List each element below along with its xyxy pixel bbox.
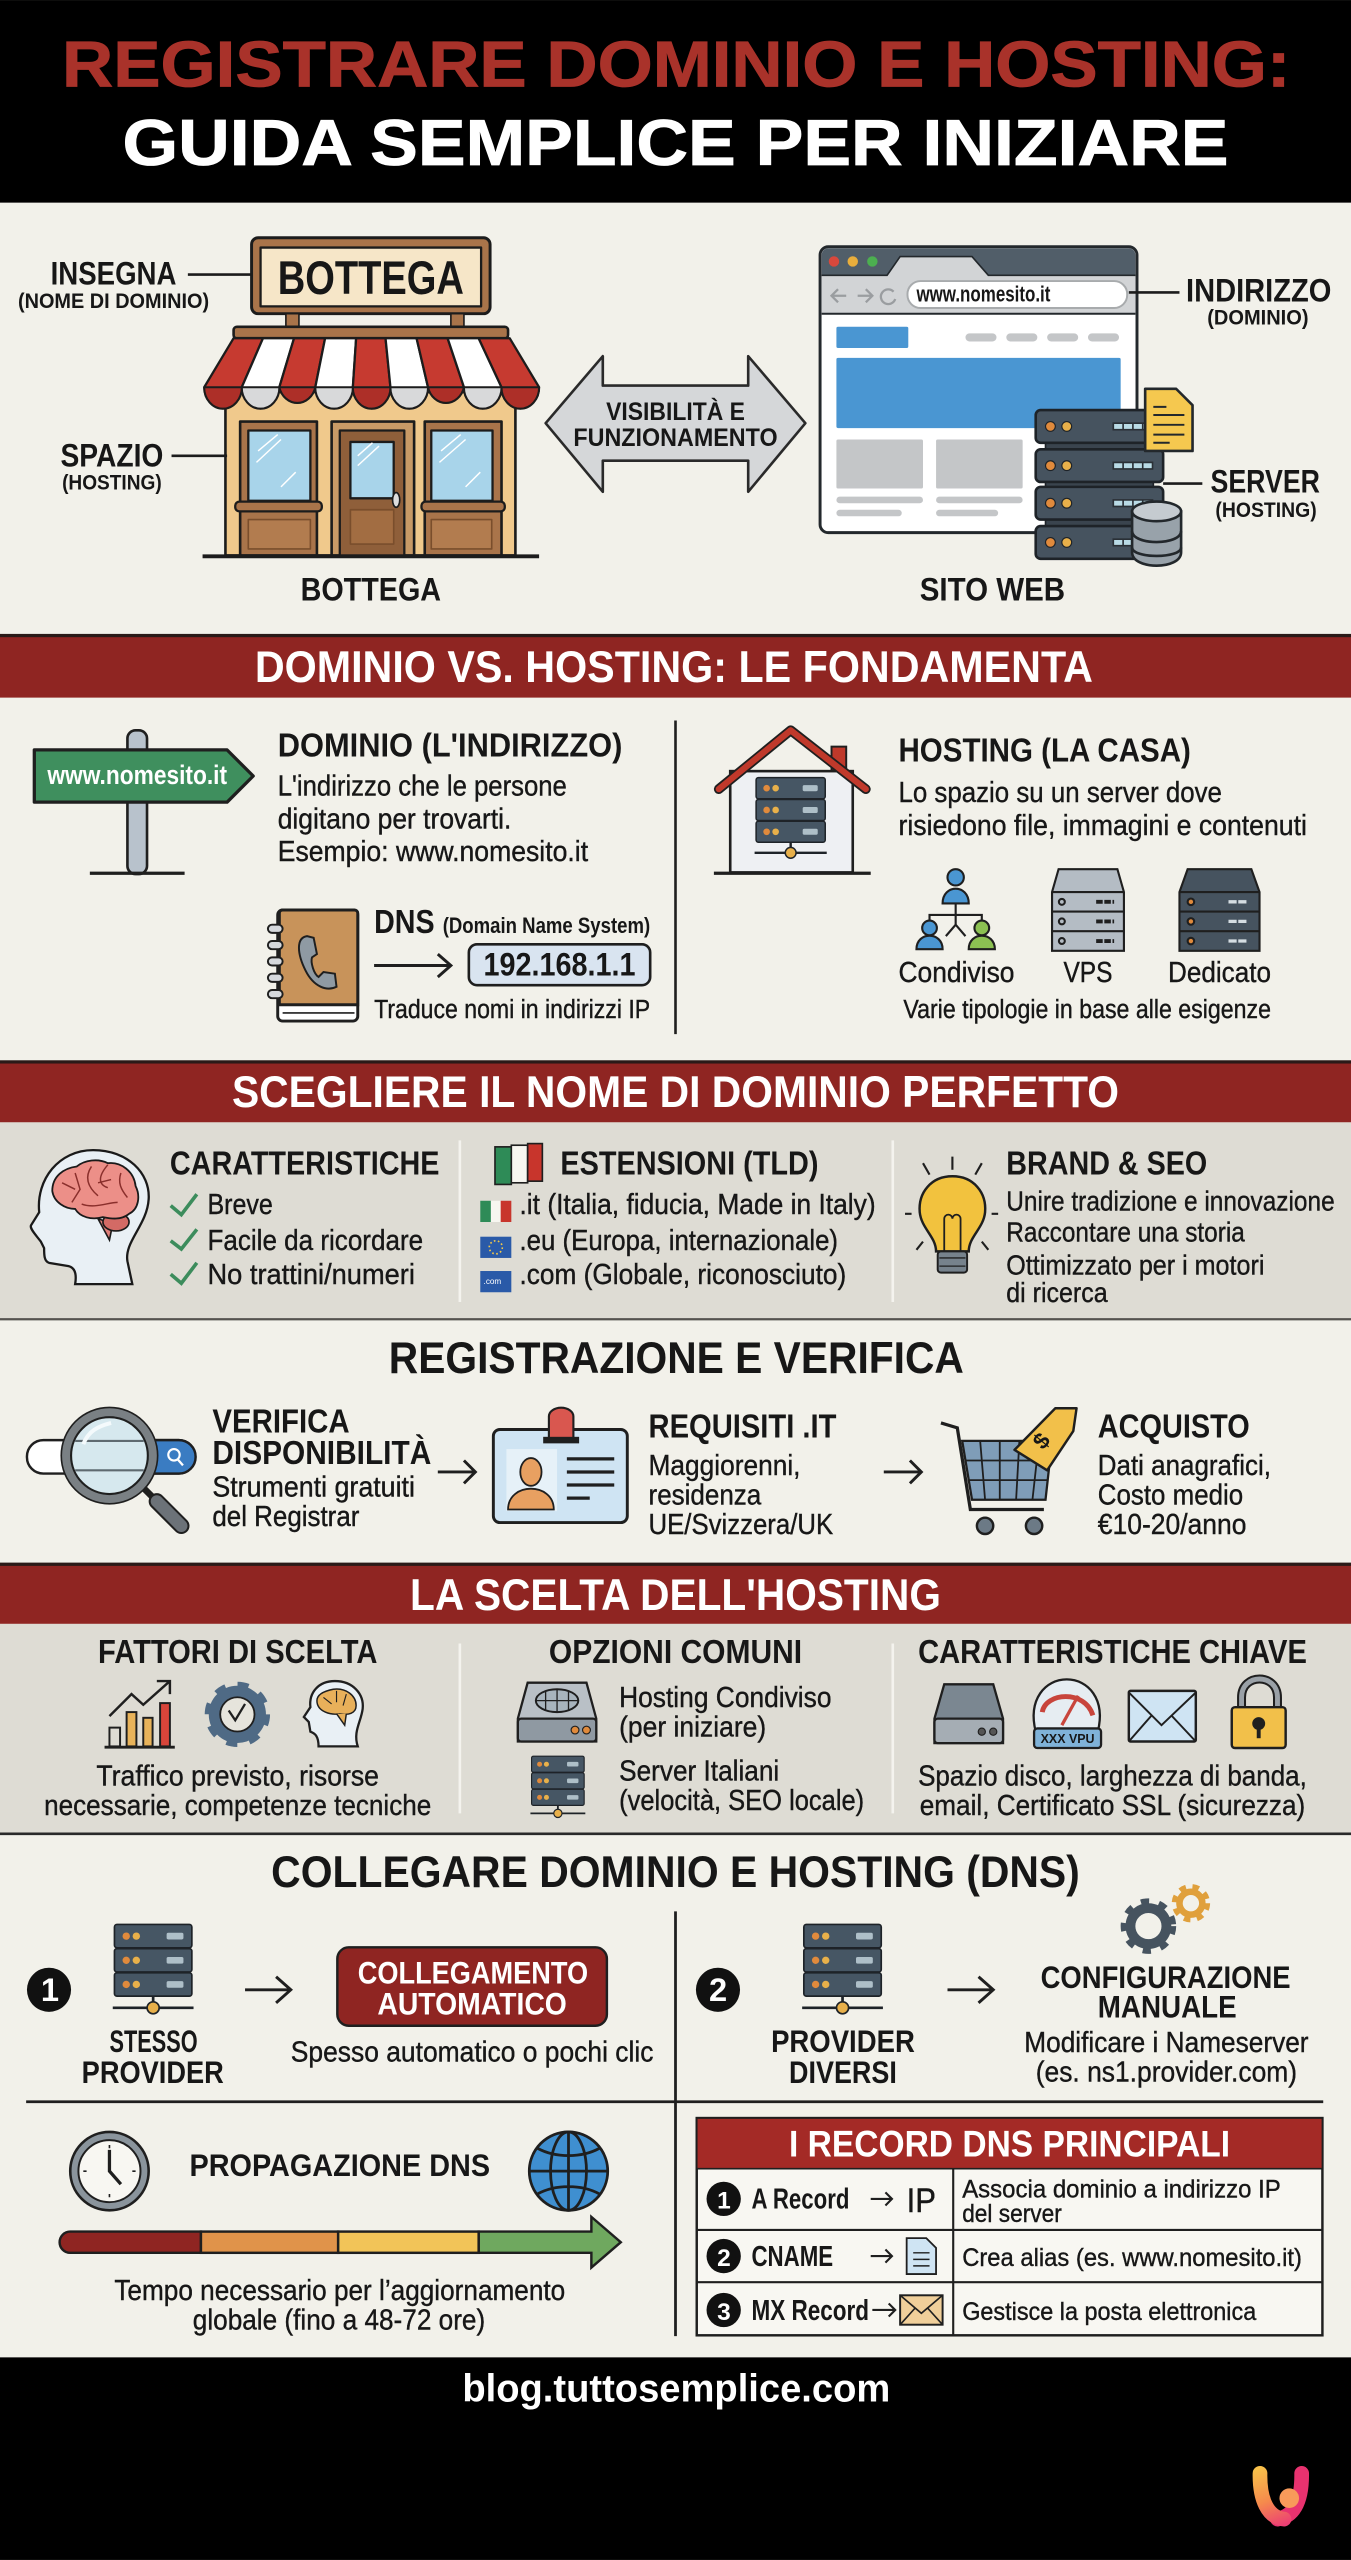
label: stesso provider — [82, 2023, 224, 2090]
label: indirizzo — [1129, 271, 1331, 329]
text: dominio description: digitano per trovarti. — [278, 803, 511, 835]
text: server italiani: Server Italiani — [619, 1756, 779, 1788]
text: propagation description: Tempo necessario per l’aggiornamento — [114, 2275, 565, 2307]
text: requisiti: residenza — [649, 1480, 761, 1512]
text: acquisto — [1098, 1409, 1271, 1541]
arrow — [947, 1977, 993, 2003]
arrow — [884, 1461, 921, 1483]
header band with title — [0, 0, 1351, 203]
double arrow: FUNZIONAMENTO — [573, 424, 778, 452]
icon: growth chart — [105, 1681, 175, 1747]
list: caratteristiche: No trattini/numeri — [207, 1259, 415, 1291]
icon: shopping cart: $ — [1027, 1427, 1055, 1454]
label: spazio: (HOSTING) — [62, 471, 162, 494]
heading: hosting: HOSTING (LA CASA) — [898, 732, 1191, 769]
text: dns caption: Traduce nomi in indirizzi IP — [374, 994, 650, 1024]
icon: shared hosting people — [916, 869, 995, 949]
label: server: (HOSTING) — [1215, 499, 1317, 522]
arrow — [438, 1461, 475, 1483]
row: mx record — [707, 2293, 1257, 2327]
text: spesso automatico: Spesso automatico o pochi clic — [291, 2037, 653, 2069]
label: indirizzo: INDIRIZZO — [1186, 271, 1331, 308]
panel: dominio — [34, 727, 650, 1024]
icon: italian flag — [495, 1144, 542, 1184]
text: hosting condiviso: (per iniziare) — [619, 1712, 766, 1744]
list: brand and seo: Raccontare una storia — [1006, 1217, 1245, 1248]
labels: hosting types: Condiviso — [898, 957, 1014, 989]
icon: gear — [209, 1686, 266, 1743]
icon: head with gold brain — [304, 1681, 363, 1746]
icon: server stack — [1036, 389, 1193, 566]
arrow — [374, 954, 451, 977]
labels: hosting types: VPS — [1063, 957, 1112, 989]
text: dominio description — [278, 771, 588, 868]
section band: scegliere il nome — [0, 1060, 1351, 1122]
list: tld: .it (Italia, fiducia, Made in Italy) — [519, 1189, 876, 1221]
number badge 1: 1 — [41, 1971, 59, 2008]
text: hosting condiviso — [619, 1682, 832, 1744]
icon: shared server — [518, 1683, 596, 1741]
section band: scegliere il nome: SCEGLIERE IL NOME DI DOMINIO PERFETTO — [232, 1068, 1119, 1117]
list: brand and seo — [1006, 1186, 1335, 1308]
text: dominio description: L'indirizzo che le persone — [278, 771, 567, 803]
table: dns records — [696, 2118, 1323, 2336]
text: requisiti: Maggiorenni, — [649, 1450, 800, 1482]
text: fattori description — [44, 1761, 431, 1822]
logo — [1260, 2473, 1302, 2519]
text: requisiti: UE/Svizzera/UK — [649, 1509, 833, 1541]
label: provider diversi — [771, 2023, 915, 2090]
label: stesso provider: STESSO — [109, 2023, 198, 2059]
icon: gears — [1124, 1887, 1207, 1951]
section band: la scelta dell'hosting — [0, 1563, 1351, 1624]
labels: hosting types — [898, 957, 1271, 989]
row: a record: del server — [962, 2200, 1062, 2228]
text: acquisto: €10-20/anno — [1098, 1509, 1246, 1541]
progress arrow — [60, 2217, 621, 2268]
text: dns title: (Domain Name System) — [443, 913, 650, 938]
step 2: different providers — [696, 1887, 1309, 2090]
text: hosting types caption: Varie tipologie in base alle esigenze — [903, 994, 1271, 1024]
icon: light bulb — [905, 1157, 998, 1273]
label: insegna: INSEGNA — [51, 254, 176, 291]
text: dominio description: Esempio: www.nomesito.it — [278, 836, 588, 868]
text: verifica — [212, 1404, 431, 1533]
icon: server — [802, 1924, 883, 2014]
row: cname — [707, 2238, 1302, 2274]
text: requisiti — [649, 1409, 837, 1541]
header band with title: REGISTRARE DOMINIO E HOSTING: — [62, 28, 1291, 101]
panel: la scelta dell'hosting — [0, 1624, 1351, 1834]
text: fattori description: necessarie, competenze tecniche — [44, 1790, 431, 1822]
icon: shop — [203, 238, 539, 556]
text: configurazione manuale: (es. ns1.provider.com) — [1036, 2056, 1297, 2088]
text: requisiti: REQUISITI .IT — [649, 1409, 837, 1446]
text: verifica: Strumenti gratuiti — [212, 1471, 415, 1503]
label: server — [1163, 463, 1320, 522]
button: collegamento automatico — [337, 1947, 607, 2026]
panel: scegliere il nome — [0, 1122, 1351, 1319]
header band with title: GUIDA SEMPLICE PER INIZIARE — [123, 106, 1228, 179]
row: a record: IP — [907, 2182, 936, 2220]
footer band — [0, 2357, 1351, 2560]
icon: speed gauge — [1034, 1679, 1101, 1748]
row: cname: 2 — [717, 2245, 731, 2272]
row: a record — [707, 2175, 1281, 2228]
heading: caratteristiche: CARATTERISTICHE — [170, 1146, 439, 1183]
icon: road sign: www.nomesito.it — [47, 760, 227, 790]
list: tld: .com (Globale, riconosciuto) — [519, 1259, 846, 1291]
double arrow: VISIBILITÀ E — [606, 397, 745, 426]
icon: server — [113, 1924, 194, 2014]
arrow — [245, 1977, 291, 2003]
text: acquisto: Dati anagrafici, — [1098, 1450, 1271, 1482]
icon: padlock — [1232, 1679, 1286, 1748]
icon: database — [1132, 502, 1181, 566]
label: indirizzo: (DOMINIO) — [1207, 306, 1309, 329]
panel: registrazione e verifica — [27, 1334, 1271, 1541]
hero panel: shop vs website — [18, 238, 1331, 607]
label: spazio: SPAZIO — [60, 436, 163, 473]
heading: dominio: DOMINIO (L'INDIRIZZO) — [278, 727, 622, 764]
label: provider diversi: PROVIDER — [771, 2023, 915, 2059]
double arrow — [546, 356, 805, 492]
heading: opzioni comuni: OPZIONI COMUNI — [549, 1634, 802, 1671]
list: brand and seo: di ricerca — [1006, 1277, 1108, 1308]
icon: road sign — [34, 730, 253, 874]
table: dns records: I RECORD DNS PRINCIPALI — [789, 2123, 1230, 2164]
label: insegna: (NOME DI DOMINIO) — [18, 290, 209, 313]
label: provider diversi: DIVERSI — [789, 2054, 897, 2090]
list: tld — [480, 1189, 876, 1292]
label: spazio — [60, 436, 227, 494]
section band: la scelta dell'hosting: LA SCELTA DELL'HOSTING — [410, 1571, 941, 1620]
label: stesso provider: PROVIDER — [82, 2054, 224, 2090]
text: configurazione manuale: CONFIGURAZIONE — [1041, 1959, 1291, 1995]
text: propagation description: globale (fino a 48-72 ore) — [193, 2305, 485, 2337]
icon: clock — [70, 2132, 149, 2210]
text: verifica: VERIFICA — [212, 1404, 350, 1441]
label: insegna — [18, 254, 252, 313]
icon: vps server — [1052, 869, 1124, 951]
icon: server rack — [530, 1756, 585, 1817]
row: a record: 1 — [717, 2188, 731, 2215]
list: tld: .eu (Europa, internazionale) — [519, 1225, 838, 1257]
text: dns title — [374, 904, 650, 941]
row: mx record: MX Record — [751, 2295, 869, 2327]
text: configurazione manuale — [1024, 1959, 1309, 2088]
text: acquisto: Costo medio — [1098, 1480, 1243, 1512]
text: configurazione manuale: MANUALE — [1098, 1989, 1237, 2025]
text: caratteristiche chiave description: Spazio disco, larghezza di banda, — [918, 1761, 1307, 1793]
heading: collegare: COLLEGARE DOMINIO E HOSTING (DNS) — [271, 1848, 1080, 1897]
caption: sito web: SITO WEB — [920, 570, 1065, 607]
icon: envelope — [1129, 1691, 1196, 1741]
text: hosting description — [898, 777, 1307, 842]
heading: registrazione: REGISTRAZIONE E VERIFICA — [389, 1334, 964, 1383]
text: server italiani — [619, 1756, 864, 1817]
label: server: SERVER — [1211, 463, 1320, 500]
list: brand and seo: Ottimizzato per i motori — [1006, 1249, 1264, 1280]
ip address box: 192.168.1.1 — [484, 945, 635, 982]
number badge 2 — [696, 1968, 740, 2012]
icon: head with brain — [31, 1150, 149, 1284]
heading: brand and seo: BRAND & SEO — [1006, 1146, 1207, 1183]
labels: hosting types: Dedicato — [1168, 957, 1271, 989]
text: hosting description: risiedono file, immagini e contenuti — [898, 810, 1307, 842]
panel: hosting — [714, 730, 1307, 1024]
heading: estensioni: ESTENSIONI (TLD) — [560, 1146, 818, 1183]
text: server italiani: (velocità, SEO locale) — [619, 1785, 864, 1817]
heading: propagazione dns: PROPAGAZIONE DNS — [189, 2147, 490, 2183]
text: propagation description — [114, 2275, 565, 2337]
list: caratteristiche: Breve — [207, 1189, 273, 1221]
propagation panel — [60, 2132, 621, 2337]
number badge 1 — [27, 1968, 71, 2012]
row: a record: A Record — [751, 2184, 849, 2216]
step 1: same provider — [27, 1924, 653, 2090]
icon: speed gauge: XXX VPU — [1041, 1731, 1095, 1746]
button: collegamento automatico: AUTOMATICO — [377, 1985, 567, 2021]
list: tld: .com — [484, 1277, 501, 1286]
icon: address book — [268, 910, 358, 1021]
row: cname: CNAME — [751, 2241, 833, 2273]
text: verifica: del Registrar — [212, 1501, 360, 1533]
icon: browser window — [820, 247, 1137, 533]
icon: shopping cart — [941, 1408, 1077, 1534]
section band: dominio vs hosting: DOMINIO VS. HOSTING: LE FONDAMENTA — [255, 643, 1093, 692]
caption: bottega: BOTTEGA — [301, 570, 441, 607]
icon: browser window: www.nomesito.it — [916, 281, 1051, 306]
panel: collegare dominio e hosting — [26, 1848, 1323, 2337]
text: fattori description: Traffico previsto, risorse — [96, 1761, 379, 1793]
icon: disk — [934, 1684, 1003, 1743]
sign text: BOTTEGA — [278, 252, 464, 305]
row: a record: Associa dominio a indirizzo IP — [962, 2175, 1281, 2203]
footer band: blog.tuttosemplice.com — [462, 2367, 890, 2410]
text: hosting description: Lo spazio su un server dove — [898, 777, 1222, 809]
text: acquisto: ACQUISTO — [1098, 1409, 1250, 1446]
row: mx record: Gestisce la posta elettronica — [962, 2298, 1257, 2326]
text: hosting condiviso: Hosting Condiviso — [619, 1682, 832, 1714]
icon: dedicated server — [1179, 869, 1260, 951]
icon: globe — [529, 2132, 608, 2210]
icon: document — [1145, 389, 1193, 451]
text: caratteristiche chiave description — [918, 1761, 1307, 1822]
text: verifica: DISPONIBILITÀ — [212, 1434, 431, 1472]
icon: id badge — [493, 1408, 627, 1523]
list: caratteristiche — [171, 1189, 423, 1291]
icon: house with server — [714, 730, 871, 873]
row: cname: Crea alias (es. www.nomesito.it) — [962, 2244, 1302, 2272]
text: caratteristiche chiave description: email, Certificato SSL (sicurezza) — [920, 1790, 1305, 1822]
number badge 2: 2 — [709, 1971, 727, 2008]
text: dns title: DNS — [374, 904, 435, 941]
heading: fattori di scelta: FATTORI DI SCELTA — [98, 1634, 377, 1671]
row: mx record: 3 — [717, 2299, 731, 2326]
icon: magnifier over search bar — [27, 1407, 196, 1526]
list: caratteristiche: Facile da ricordare — [207, 1225, 423, 1257]
text: configurazione manuale: Modificare i Nameserver — [1024, 2027, 1309, 2059]
button: collegamento automatico: COLLEGAMENTO — [358, 1954, 588, 1990]
section band: dominio vs hosting — [0, 634, 1351, 698]
